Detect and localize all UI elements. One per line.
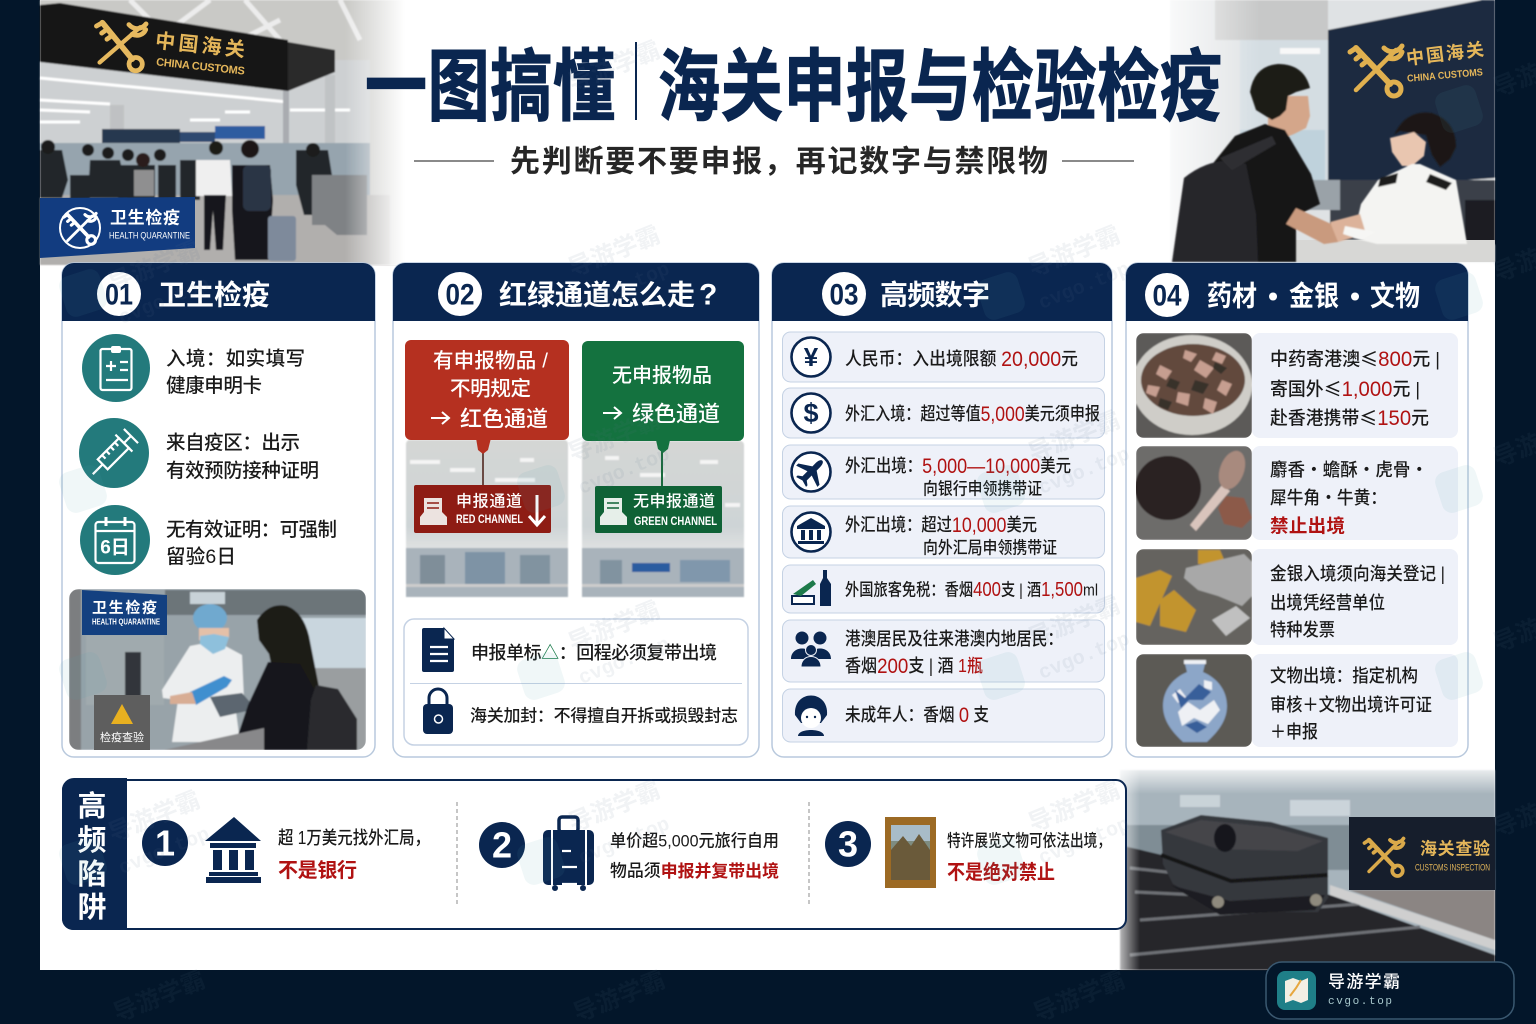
sign: red channel: RED CHANNEL bbox=[456, 514, 523, 526]
heading: traps: 阱 bbox=[77, 891, 107, 924]
warning sign: 检疫查验 bbox=[100, 730, 144, 744]
watermarks: 导游学霸 bbox=[1025, 777, 1124, 838]
heading: 01: 01 bbox=[105, 278, 133, 312]
row: minors bbox=[782, 689, 1104, 742]
sign: china customs gold logo: CHINA CUSTOMS bbox=[156, 56, 245, 78]
panel: 02 red green channels bbox=[393, 263, 759, 757]
row: foreign passengers: 外国旅客免税：香烟400支 | 酒1,500ml bbox=[845, 579, 1098, 601]
warning sign bbox=[94, 695, 150, 750]
sign: green channel: 无申报通道 bbox=[633, 492, 715, 510]
row: forex in: 外汇入境：超过等值5,000美元须申报 bbox=[845, 402, 1100, 426]
row: prohibited: 犀牛角・牛黄： bbox=[1270, 488, 1387, 508]
row: HK Macao residents: 香烟200支 | 酒 1瓶 bbox=[845, 654, 983, 678]
heading: traps: 高 bbox=[77, 790, 107, 823]
heading: 02: 红绿通道怎么走 bbox=[499, 280, 695, 310]
trap 1: 不是银行 bbox=[278, 859, 357, 882]
watermarks: 导游学霸 bbox=[565, 407, 664, 468]
photo: gold and silver bbox=[1136, 549, 1252, 645]
row: herbs: 寄国外≤1,000元 | bbox=[1270, 376, 1420, 402]
notes box bbox=[404, 619, 748, 745]
heading: traps: 频 bbox=[77, 824, 107, 857]
nurse bbox=[162, 604, 244, 742]
title bbox=[365, 42, 1222, 131]
text: entry: 入境：如实填写 bbox=[166, 348, 305, 370]
heading: 02: ? bbox=[699, 278, 717, 312]
row: forex out bank: 向银行申领携带证 bbox=[923, 480, 1042, 498]
heading: 04 bbox=[1126, 263, 1468, 321]
watermarks: 导游学霸 bbox=[105, 787, 204, 848]
sign: red channel bbox=[414, 485, 551, 533]
sign: HEALTH QUARANTINE bbox=[92, 618, 161, 626]
watermarks: 导游学霸 bbox=[565, 222, 664, 283]
heading: 01 bbox=[62, 263, 375, 321]
title: 一图搞懂 bbox=[365, 43, 615, 131]
watermarks: 导游学霸 bbox=[1025, 592, 1124, 653]
row: foreign passengers bbox=[782, 565, 1104, 613]
tablet bbox=[210, 693, 256, 717]
heading: 04: 文物 bbox=[1370, 280, 1420, 312]
panel: 01 health quarantine bbox=[62, 263, 375, 757]
heading: 04: 药材 bbox=[1207, 280, 1257, 312]
sign: health quarantine: HEALTH QUARANTINE bbox=[109, 230, 190, 242]
row: herbs bbox=[1132, 333, 1458, 438]
panel: frequent traps bbox=[62, 778, 1126, 930]
heading: 02 bbox=[393, 263, 759, 321]
trap 3: 不是绝对禁止 bbox=[947, 860, 1055, 884]
row: gold silver: 出境凭经营单位 bbox=[1270, 592, 1385, 613]
photo: herbs bbox=[1132, 333, 1252, 438]
traveller, white shirt bbox=[196, 141, 232, 250]
icon: calendar: 6日 bbox=[100, 538, 130, 558]
heading: 01: 卫生检疫 bbox=[158, 280, 270, 310]
trap 1: 1 bbox=[155, 822, 175, 864]
heading: 02: 02 bbox=[446, 278, 474, 312]
row: relics bbox=[1136, 654, 1458, 747]
red channel: 有申报物品 / bbox=[433, 350, 548, 372]
row: herbs: 赴香港携带≤150元 bbox=[1270, 405, 1429, 431]
logo: customs gold, right bbox=[1350, 39, 1485, 96]
text: entry bbox=[166, 348, 305, 397]
green channel bbox=[582, 341, 744, 597]
watermarks: cvgo.top bbox=[116, 823, 213, 881]
photo: customs hall, top left bbox=[40, 0, 415, 265]
row: prohibited: 麝香・蟾酥・虎骨・ bbox=[1270, 459, 1428, 480]
trap 3: 特许展览文物可依法出境， bbox=[947, 832, 1111, 850]
traveller bbox=[238, 605, 320, 750]
arrow: to green channel bbox=[603, 407, 621, 419]
row: minors: 未成年人：香烟 0 支 bbox=[845, 704, 989, 726]
watermarks: 导游学霸 bbox=[565, 777, 664, 838]
watermarks: cvgo.top bbox=[1036, 813, 1133, 871]
trap 1 bbox=[142, 817, 430, 883]
text: entry: 健康申明卡 bbox=[166, 375, 262, 397]
photo: prohibited goods bbox=[1135, 446, 1252, 540]
red channel bbox=[405, 340, 569, 597]
sign: green channel bbox=[595, 486, 722, 533]
watermarks: cvgo.top bbox=[576, 258, 673, 316]
sign: customs inspection bbox=[1349, 817, 1495, 890]
trap 1: 超 1万美元找外汇局， bbox=[278, 828, 430, 848]
heading: 04: 金银 bbox=[1289, 280, 1339, 312]
row: HK Macao residents bbox=[782, 620, 1104, 682]
trap 3: 3 bbox=[838, 824, 858, 864]
icon: syringe bbox=[79, 418, 149, 488]
green channel: 绿色通道 bbox=[632, 402, 720, 426]
row: forex out bureau: 向外汇局申领携带证 bbox=[923, 538, 1057, 558]
icon: calendar bbox=[80, 505, 150, 575]
text: seal: 海关加封：不得擅自开拆或损毁封志 bbox=[470, 706, 738, 726]
row: relics: 文物出境：指定机构 bbox=[1270, 666, 1418, 686]
traveller at counter bbox=[1198, 64, 1340, 262]
sign: china customs gold logo: 中国海关 bbox=[154, 29, 246, 62]
icon: clipboard bbox=[82, 334, 150, 402]
text: epidemic: 有效预防接种证明 bbox=[166, 460, 319, 482]
icon: suitcase bbox=[543, 817, 594, 891]
row: herbs: 中药寄港澳≤800元 | bbox=[1270, 346, 1440, 372]
backpack bbox=[307, 685, 357, 750]
row: forex out bank: 外汇出境：5,000—10,000美元 bbox=[845, 454, 1071, 478]
row: relics: 审核＋文物出境许可证 bbox=[1270, 694, 1432, 715]
icon: painting bbox=[885, 817, 936, 888]
heading: 03 bbox=[772, 263, 1112, 321]
row: prohibited bbox=[1135, 446, 1458, 540]
dashed divider bbox=[808, 802, 810, 905]
watermarks: 导游学霸 bbox=[565, 37, 664, 98]
sign: china customs gold logo bbox=[94, 20, 246, 78]
row: forex in bbox=[782, 388, 1104, 438]
subtitle: 先判断要不要申报，再记数字与禁限物 bbox=[510, 146, 1048, 178]
icon: bank bbox=[205, 817, 261, 883]
watermarks: cvgo.top bbox=[1036, 258, 1133, 316]
photo: luggage conveyor bbox=[1110, 760, 1495, 970]
arrow: to red channel bbox=[431, 412, 449, 424]
row: gold silver bbox=[1136, 549, 1458, 645]
logo: customs gold, right: 中国海关 bbox=[1405, 39, 1485, 69]
title: 海关申报与检验检疫 bbox=[658, 43, 1222, 131]
trap 2: 2 bbox=[492, 824, 512, 866]
watermarks: cvgo.top bbox=[576, 443, 673, 501]
backpack bbox=[1172, 161, 1258, 262]
trap 2 bbox=[479, 817, 779, 891]
sign: health quarantine: 卫生检疫 bbox=[110, 208, 180, 228]
watermarks: cvgo.top bbox=[116, 273, 213, 331]
row: HK Macao residents: 港澳居民及往来港澳内地居民： bbox=[845, 629, 1063, 649]
heading: traps bbox=[62, 778, 127, 930]
watermarks: cvgo.top bbox=[1036, 628, 1133, 686]
row: forex out bureau bbox=[782, 506, 1104, 558]
trap 2: 单价超5,000元旅行自用 bbox=[610, 832, 779, 850]
logo: cvgo badge: cvgo.top bbox=[1328, 996, 1392, 1008]
watermarks: cvgo.top bbox=[576, 633, 673, 691]
panel: 03 key numbers bbox=[772, 263, 1112, 757]
sign: customs inspection: 海关查验 bbox=[1420, 838, 1490, 858]
heading: 03: 03 bbox=[830, 278, 858, 312]
text: no certificate: 无有效证明：可强制 bbox=[166, 519, 337, 541]
sign: red channel: 申报通道 bbox=[456, 492, 522, 510]
heading: 03: 高频数字 bbox=[880, 280, 990, 310]
watermarks: 导游学霸 bbox=[1025, 222, 1124, 283]
sign: health quarantine bbox=[40, 197, 195, 258]
photo: porcelain vase bbox=[1136, 654, 1252, 747]
row: relics: ＋申报 bbox=[1270, 722, 1318, 742]
row: gold silver: 特种发票 bbox=[1270, 620, 1335, 640]
icon: lock bbox=[423, 689, 453, 734]
watermarks: cvgo.top bbox=[1036, 443, 1133, 501]
row: forex in: $ bbox=[803, 398, 819, 428]
text: no certificate bbox=[166, 519, 337, 568]
panel: 04 medicine gold relics bbox=[1126, 263, 1468, 757]
row: RMB: ¥ bbox=[804, 342, 819, 372]
icon: document bbox=[422, 628, 454, 672]
heading: 04: 04 bbox=[1152, 280, 1182, 312]
logo: cvgo badge bbox=[1266, 962, 1514, 1019]
green channel: 无申报物品 bbox=[612, 364, 712, 387]
logo: cvgo badge: 导游学霸 bbox=[1328, 972, 1400, 992]
row: RMB bbox=[782, 332, 1104, 382]
sign bbox=[82, 590, 167, 635]
suitcase bbox=[1161, 815, 1328, 915]
watermarks: 导游学霸 bbox=[1025, 407, 1124, 468]
logo: customs gold, right: CHINA CUSTOMS bbox=[1407, 67, 1484, 85]
traveller, backpack bbox=[232, 140, 273, 260]
trap 2: 物品须申报并复带出境 bbox=[610, 860, 779, 880]
row: RMB: 人民币：入出境限额 20,000元 bbox=[845, 348, 1078, 370]
icon: map app bbox=[1277, 971, 1316, 1010]
text: no certificate: 留验6日 bbox=[166, 546, 236, 568]
text: epidemic bbox=[166, 432, 319, 482]
sign: green channel: GREEN CHANNEL bbox=[634, 514, 717, 528]
heading: traps: 陷 bbox=[77, 858, 107, 891]
heading: 04: • bbox=[1350, 280, 1360, 312]
trap 3 bbox=[825, 817, 1111, 888]
sign: customs inspection: CUSTOMS INSPECTION bbox=[1415, 862, 1490, 874]
row: gold silver: 金银入境须向海关登记 | bbox=[1270, 564, 1445, 584]
row: forex out bank bbox=[782, 445, 1104, 499]
watermarks: 导游学霸 bbox=[105, 237, 204, 298]
heading: 04: • bbox=[1268, 280, 1278, 312]
row: prohibited: 禁止出境 bbox=[1270, 516, 1345, 536]
watermarks: cvgo.top bbox=[576, 813, 673, 871]
photo: health officer bbox=[69, 589, 366, 750]
row: forex out bureau: 外汇出境：超过10,000美元 bbox=[845, 514, 1037, 536]
dashed divider bbox=[456, 802, 458, 905]
sign: 卫生检疫 bbox=[92, 598, 157, 616]
red channel: 红色通道 bbox=[460, 406, 548, 432]
photo: officer counter, top right bbox=[1150, 0, 1495, 262]
text: epidemic: 来自疫区：出示 bbox=[166, 432, 300, 454]
watermarks: 导游学霸 bbox=[565, 597, 664, 658]
red channel: 不明规定 bbox=[450, 378, 531, 400]
officer bbox=[1330, 112, 1467, 244]
text: declaration: 申报单标△：回程必须复带出境 bbox=[471, 643, 717, 663]
